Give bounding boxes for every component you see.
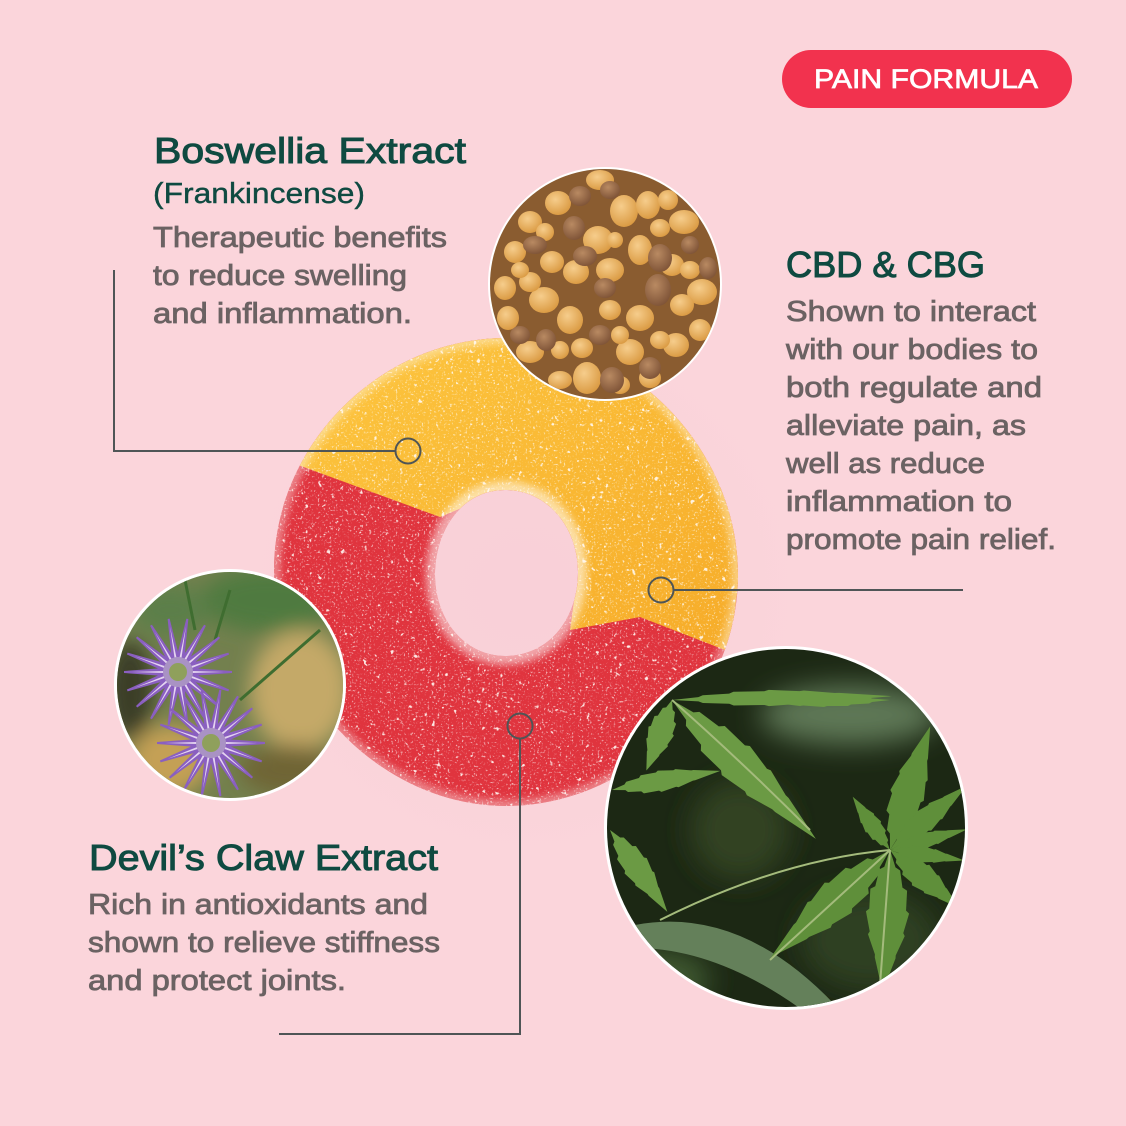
pain formula badge (782, 50, 1072, 108)
text: Boswellia Extract: Therapeutic benefits (153, 222, 447, 254)
connector: Devil's Claw (279, 714, 532, 1034)
text: Devil's Claw Extract: Rich in antioxidants and (88, 889, 428, 921)
text: Devil's Claw Extract (88, 837, 440, 997)
text: Boswellia Extract: and inflammation. (153, 298, 412, 330)
soft shadow (225, 300, 825, 880)
text: CBD and CBG: Shown to interact (786, 296, 1036, 328)
text: CBD and CBG: well as reduce (785, 448, 985, 480)
text: CBD and CBG: both regulate and (786, 372, 1042, 404)
text: CBD and CBG: promote pain relief. (786, 524, 1056, 556)
text: Devil's Claw Extract: and protect joints. (88, 965, 346, 997)
text: Devil's Claw Extract: shown to relieve stiffness (88, 927, 440, 959)
pain formula badge: PAIN FORMULA (814, 64, 1038, 94)
gummy ring (274, 338, 738, 806)
connector: Boswellia (114, 270, 420, 464)
text: Boswellia Extract: to reduce swelling (153, 260, 407, 292)
text: Boswellia Extract (153, 130, 466, 330)
photo: cannabis (599, 645, 974, 1017)
photo: devil's claw flower (106, 568, 350, 802)
text: CBD and CBG: inflammation to (786, 486, 1012, 518)
text: Boswellia Extract: Boswellia Extract (154, 130, 466, 171)
text: CBD and CBG: alleviate pain, as (786, 410, 1026, 442)
photo: frankincense (485, 165, 725, 405)
text: CBD and CBG (785, 244, 1056, 556)
text: Boswellia Extract: (Frankincense) (153, 178, 365, 210)
connector: CBD (648, 578, 963, 602)
text: CBD and CBG: CBD & CBG (786, 244, 985, 285)
text: CBD and CBG: with our bodies to (785, 334, 1038, 366)
text: Devil's Claw Extract: Devil’s Claw Extract (89, 837, 438, 878)
